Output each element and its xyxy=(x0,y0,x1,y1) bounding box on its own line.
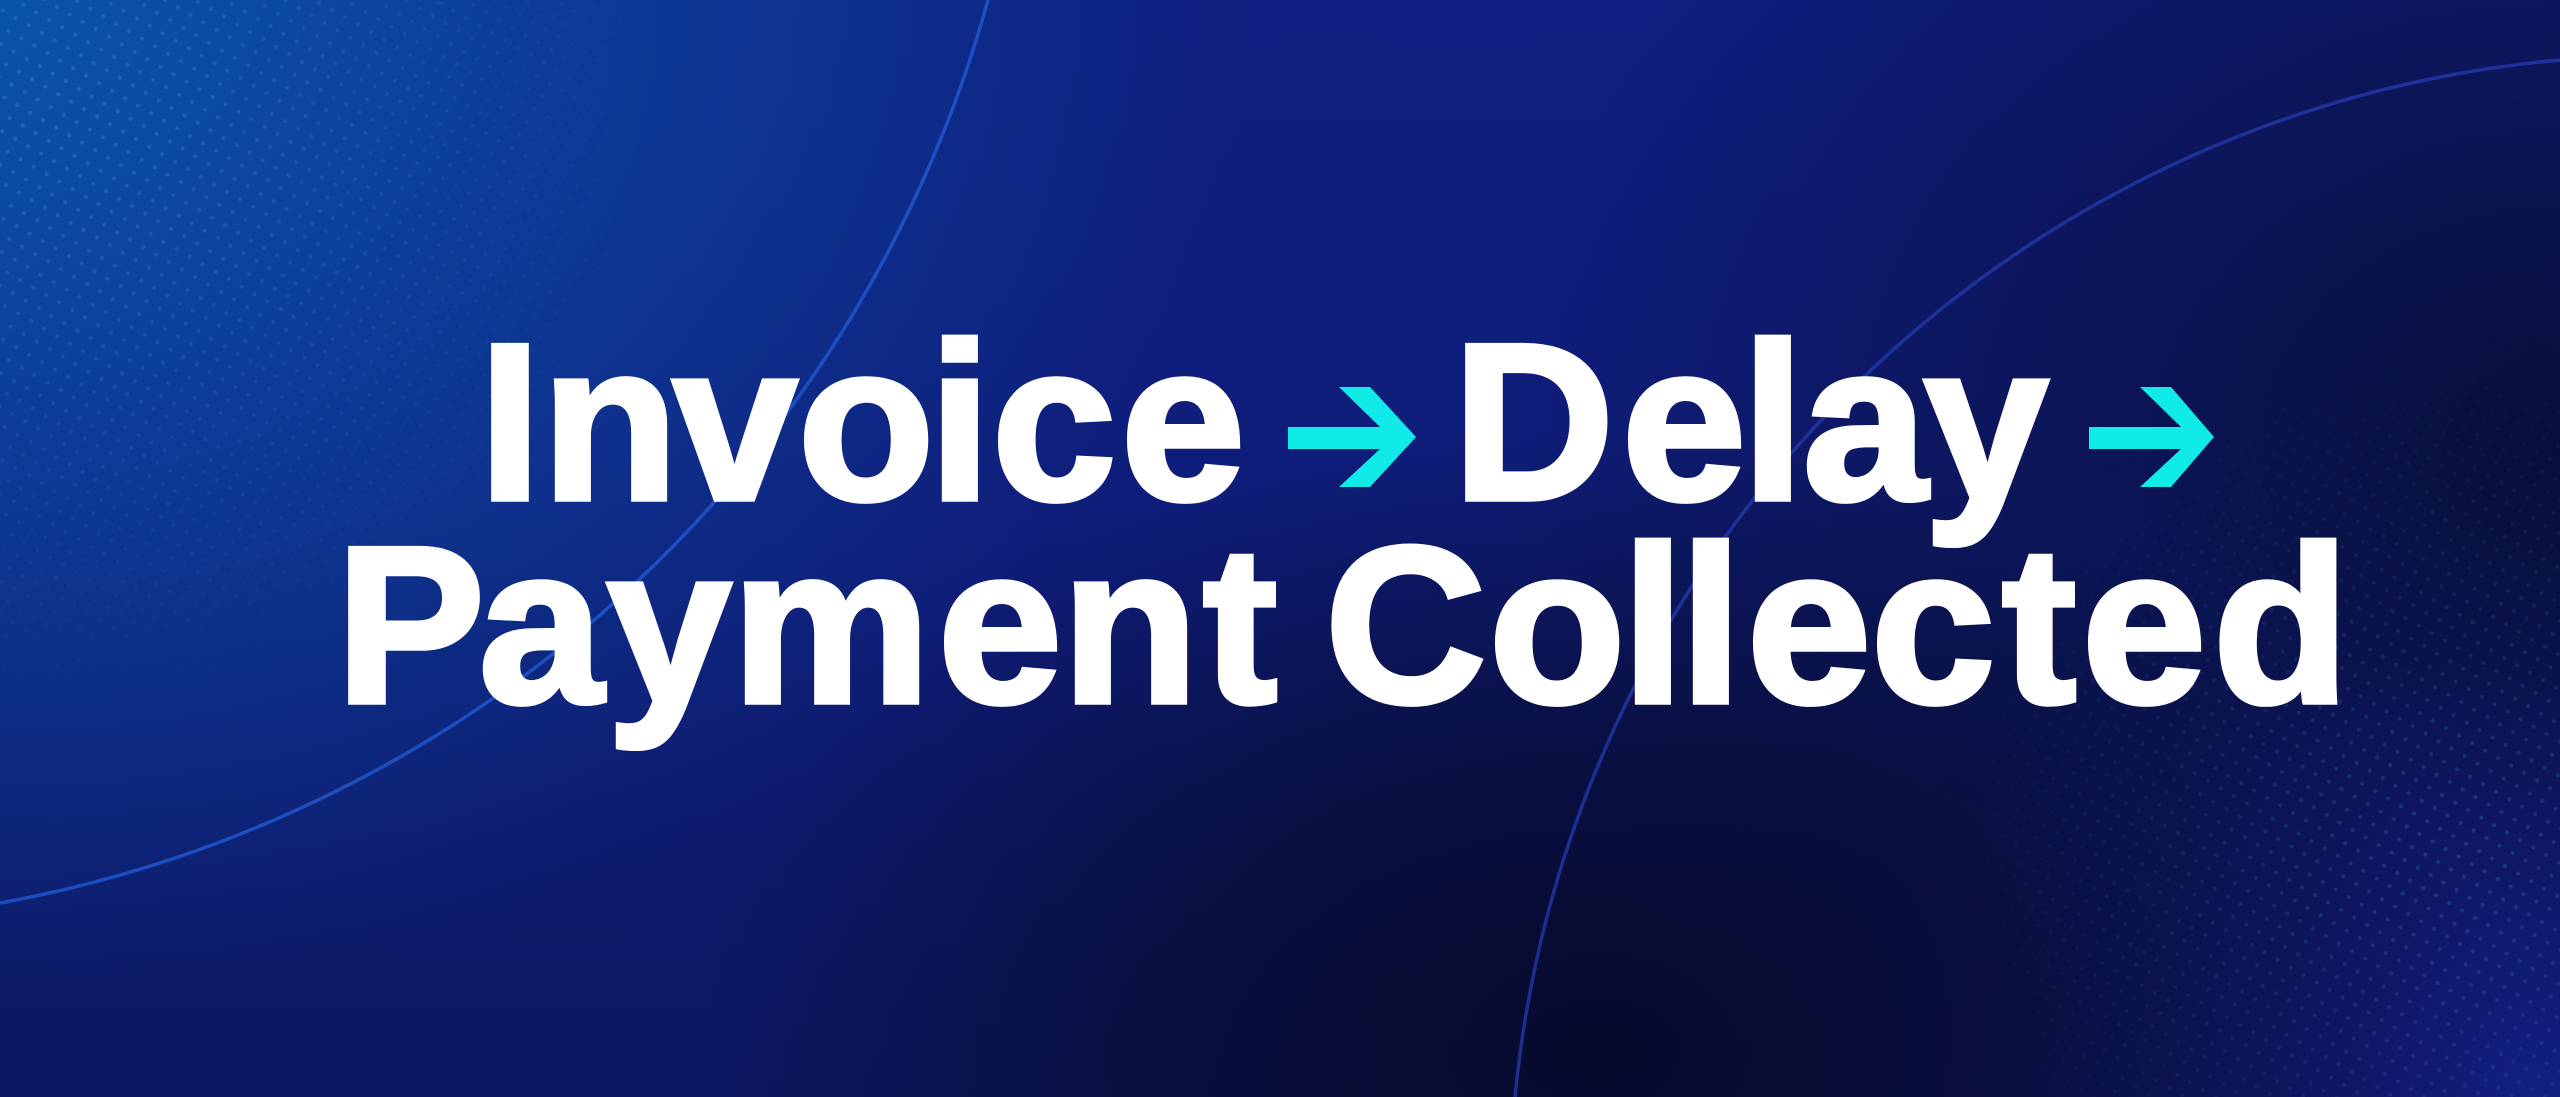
arc: right circle outline xyxy=(1515,60,2560,1097)
arc: top left circle outline xyxy=(0,0,988,903)
word: Invoice: Invoice xyxy=(479,298,1245,547)
word: Payment: Payment xyxy=(336,501,1277,750)
word: Delay: Delay xyxy=(1453,298,2048,547)
word: Collected: Collected xyxy=(1325,501,2349,750)
arrow: invoice to delay xyxy=(1288,387,1416,487)
arrow: delay to payment xyxy=(2089,387,2214,487)
title xyxy=(336,298,2349,750)
halftone dots: bottom right xyxy=(2028,430,2560,1097)
halftone dots: top left xyxy=(0,0,506,571)
